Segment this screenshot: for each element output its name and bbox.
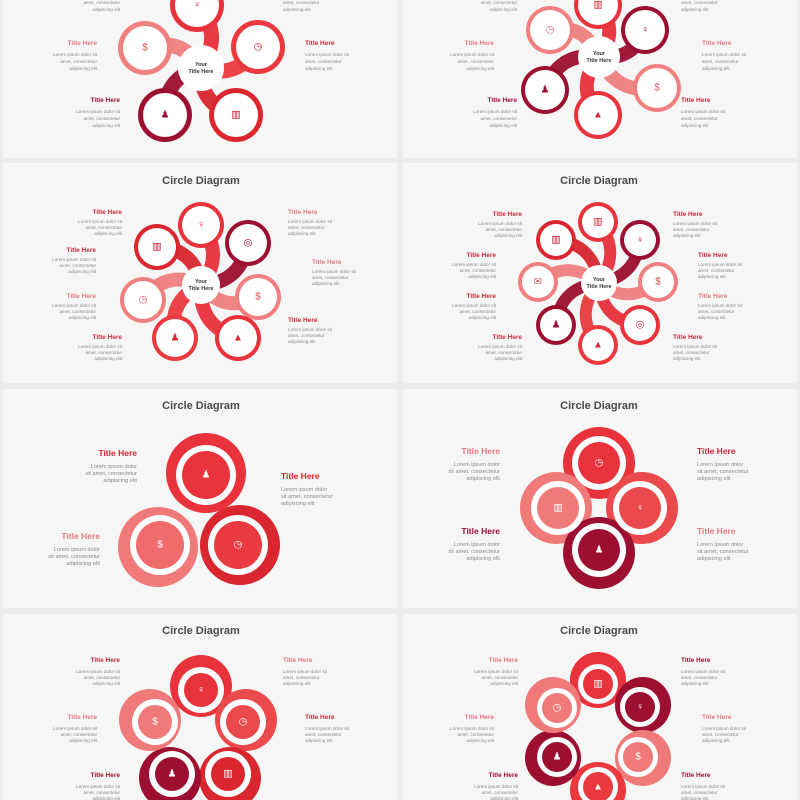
- text blocks row2 right: Title Here: [698, 252, 728, 259]
- text blocks row2 right: Title Here: [492, 211, 522, 218]
- text blocks row3 left: sit amet, consectetur: [281, 494, 333, 500]
- text blocks row2 right: Lorem ipsum dolor sit: [698, 262, 743, 267]
- circle nodes: ▲: [233, 332, 243, 344]
- center: Your Title Here: [581, 265, 617, 301]
- panel: 6-circle diagram (row4 right): $: [635, 752, 641, 762]
- text blocks row3 right: sit amet, consectetur: [448, 469, 500, 475]
- center: Your Title Here: [578, 36, 620, 78]
- center: Your Title Here: [178, 45, 224, 91]
- text blocks row2 left: adipiscing elit: [68, 315, 97, 320]
- circle nodes: ◷: [254, 42, 263, 52]
- circle nodes: ✉: [534, 276, 542, 288]
- text blocks row2 right: amet, consectetur: [698, 309, 735, 314]
- text blocks row4 right: amet, consectetur: [702, 732, 739, 737]
- text blocks row1 left: adipiscing elit: [69, 66, 98, 71]
- text blocks row4 right: adipiscing elit: [681, 681, 709, 686]
- text blocks row2 left: Title Here: [288, 317, 318, 324]
- text blocks row4 right: Lorem ipsum dolor sit: [681, 669, 726, 674]
- text blocks row3 right: Lorem ipsum dolor: [697, 542, 743, 548]
- text blocks row3 right: sit amet, consectetur: [448, 549, 500, 555]
- text blocks row1 right: adipiscing elit: [702, 66, 730, 71]
- text blocks row2 right: Lorem ipsum dolor sit: [478, 344, 523, 349]
- text blocks row4 right: Title Here: [464, 714, 494, 721]
- text blocks row2 left: amet, consectetur: [288, 225, 325, 230]
- text blocks row2 left: adipiscing elit: [288, 231, 316, 236]
- text blocks row1 right: amet, consectetur: [681, 116, 718, 121]
- text blocks row1 right: Lorem ipsum dolor sit: [702, 52, 747, 57]
- panel: 6-petal swirl (row1 right): [521, 0, 681, 139]
- panel: 5-petal swirl (row1 left): [118, 0, 285, 142]
- text blocks row2 left: Lorem ipsum dolor sit: [288, 327, 333, 332]
- heading row4 left: Circle Diagram: [162, 625, 240, 637]
- panel: 6-circle diagram (row4 right): ◷: [553, 702, 562, 714]
- text blocks row1 right: Title Here: [681, 97, 711, 104]
- text blocks row3 left: Lorem ipsum dolor: [91, 464, 137, 470]
- swirl petals: [538, 222, 658, 345]
- panel: 3-circle diagram (row3 left): ♟: [202, 470, 210, 480]
- text blocks row1 right: Lorem ipsum dolor sit: [473, 109, 518, 114]
- text blocks row3 left: Title Here: [61, 531, 100, 541]
- circle nodes: $: [654, 82, 660, 94]
- panel: 5-circle diagram (row4 left): ◷: [239, 716, 248, 728]
- text blocks row1 right: adipiscing elit: [489, 7, 518, 12]
- text blocks row4 right: amet, consectetur: [481, 790, 518, 795]
- text blocks row1 right: adipiscing elit: [489, 123, 518, 128]
- text blocks row4 right: [450, 657, 747, 800]
- text blocks row1 left: amet, consectetur: [283, 0, 320, 5]
- text blocks row2 right: adipiscing elit: [698, 274, 726, 279]
- text blocks row3 left: [48, 448, 333, 567]
- text blocks row1 right: Title Here: [702, 40, 732, 47]
- circle nodes: $: [255, 292, 261, 302]
- text blocks row2 right: amet, consectetur: [485, 227, 522, 232]
- text blocks row4 right: Title Here: [702, 714, 732, 721]
- panel: 3-circle diagram (row3 left): [118, 433, 280, 587]
- center: Your Title Here: Title Here: [587, 58, 611, 64]
- text blocks row2 right: Lorem ipsum dolor sit: [452, 303, 497, 308]
- text blocks row1 right: adipiscing elit: [466, 66, 495, 71]
- panel: 6-circle diagram (row4 right): ▲: [593, 782, 603, 792]
- text blocks row4 right: Lorem ipsum dolor sit: [474, 784, 519, 789]
- center: Your Title Here: Your: [593, 51, 606, 57]
- text blocks row4 left: [53, 657, 350, 800]
- text blocks row1 right: amet, consectetur: [681, 0, 718, 5]
- text blocks row1 left: Lorem ipsum dolor sit: [305, 52, 350, 57]
- text blocks row1 left: adipiscing elit: [305, 66, 333, 71]
- heading row2 left: Circle Diagram: [162, 175, 240, 187]
- text blocks row4 left: Lorem ipsum dolor sit: [305, 726, 350, 731]
- panel: 4-circle diagram (row3 right): ♀: [636, 502, 644, 514]
- circle nodes: ▲: [593, 340, 603, 350]
- text blocks row2 left: amet, consectetur: [85, 350, 122, 355]
- text blocks row2 left: amet, consectetur: [59, 263, 96, 268]
- text blocks row4 right: Title Here: [488, 772, 518, 779]
- circle nodes: ▥: [551, 234, 561, 246]
- swirl petals: [143, 225, 258, 338]
- text blocks row3 right: adipiscing elit: [697, 476, 731, 482]
- text blocks row2 left: adipiscing elit: [68, 269, 97, 274]
- circle nodes: ◎: [636, 320, 644, 330]
- text blocks row3 right: adipiscing elit: [466, 476, 500, 482]
- text blocks row2 right: adipiscing elit: [698, 315, 726, 320]
- circle nodes: [521, 0, 681, 139]
- panel: 8-petal swirl (row2 right): [518, 202, 678, 365]
- text blocks row1 left: amet, consectetur: [83, 116, 120, 121]
- circle nodes: ♀: [197, 220, 205, 230]
- text blocks row1 left: adipiscing elit: [92, 123, 121, 128]
- text blocks row2 right: Title Here: [466, 293, 496, 300]
- text blocks row1 left: amet, consectetur: [60, 59, 97, 64]
- text blocks row2 right: amet, consectetur: [698, 268, 735, 273]
- panel: 5-circle diagram (row4 left): [119, 655, 277, 800]
- text blocks row3 left: adipiscing elit: [103, 478, 137, 484]
- text blocks row1 right: Lorem ipsum dolor sit: [681, 109, 726, 114]
- panel: 4-circle diagram (row3 right): ◷: [595, 458, 604, 468]
- panel: 4-circle diagram (row3 right): ▥: [553, 502, 563, 514]
- text blocks row2 right: amet, consectetur: [673, 350, 710, 355]
- text blocks row2 right: Lorem ipsum dolor sit: [673, 221, 718, 226]
- text blocks row1 right: amet, consectetur: [702, 59, 739, 64]
- text blocks row4 left: amet, consectetur: [305, 732, 342, 737]
- text blocks row2 left: adipiscing elit: [94, 356, 123, 361]
- panel: 6-circle diagram (row4 right): [525, 652, 671, 800]
- text blocks row2 right: adipiscing elit: [468, 315, 497, 320]
- text blocks row4 left: amet, consectetur: [83, 790, 120, 795]
- text blocks row4 left: Title Here: [90, 657, 120, 664]
- panel: 5-circle diagram (row4 left): ♟: [168, 768, 176, 780]
- text blocks row4 right: Title Here: [681, 772, 711, 779]
- circle nodes: ♀: [636, 234, 644, 246]
- text blocks row2 left: amet, consectetur: [312, 275, 349, 280]
- text blocks row3 left: sit amet, consectetur: [48, 554, 100, 560]
- circle nodes: ♟: [552, 320, 560, 330]
- panel: 4-circle diagram (row3 right): ♟: [595, 544, 603, 556]
- text blocks row4 right: adipiscing elit: [466, 738, 495, 743]
- text blocks row4 left: amet, consectetur: [283, 675, 320, 680]
- text blocks row3 right: sit amet, consectetur: [697, 469, 749, 475]
- panel: 5-circle diagram (row4 left): ▥: [223, 768, 233, 780]
- panel: 3-circle diagram (row3 left): ◷: [234, 540, 243, 550]
- text blocks row4 right: amet, consectetur: [481, 675, 518, 680]
- text blocks row2 left: Title Here: [66, 293, 96, 300]
- circle nodes: ▥: [152, 242, 162, 252]
- text blocks row3 right: Lorem ipsum dolor: [697, 462, 743, 468]
- text blocks row4 right: adipiscing elit: [490, 681, 519, 686]
- text blocks row3 right: Title Here: [697, 526, 736, 536]
- text blocks row2 left: Lorem ipsum dolor sit: [288, 219, 333, 224]
- text blocks row2 right: amet, consectetur: [459, 309, 496, 314]
- text blocks row2 right: adipiscing elit: [494, 233, 523, 238]
- circle nodes: ◷: [546, 24, 555, 36]
- text blocks row4 right: amet, consectetur: [681, 675, 718, 680]
- circle nodes: [518, 202, 678, 365]
- panel: 6-circle diagram (row4 right): ▥: [593, 678, 603, 690]
- text blocks row4 left: amet, consectetur: [83, 675, 120, 680]
- text blocks row2 right: adipiscing elit: [673, 356, 701, 361]
- text blocks row4 left: amet, consectetur: [60, 732, 97, 737]
- text blocks row4 right: Title Here: [488, 657, 518, 664]
- heading row3 right: Circle Diagram: [560, 400, 638, 412]
- text blocks row2 left: Title Here: [288, 209, 318, 216]
- text blocks row2 right: amet, consectetur: [673, 227, 710, 232]
- text blocks row4 left: Title Here: [90, 772, 120, 779]
- text blocks row2 left: adipiscing elit: [94, 231, 123, 236]
- circle nodes: ♟: [161, 110, 169, 120]
- text blocks row4 left: Lorem ipsum dolor sit: [53, 726, 98, 731]
- text blocks row2 right: amet, consectetur: [485, 350, 522, 355]
- text blocks row3 right: sit amet, consectetur: [697, 549, 749, 555]
- text blocks row1 right: Title Here: [464, 40, 494, 47]
- text blocks row1 right: adipiscing elit: [681, 7, 709, 12]
- circle nodes: ♀: [641, 24, 649, 36]
- text blocks row2 right: amet, consectetur: [459, 268, 496, 273]
- text blocks row4 left: Lorem ipsum dolor sit: [76, 784, 121, 789]
- text blocks row3 right: Lorem ipsum dolor: [454, 542, 500, 548]
- text blocks row1 left: Title Here: [67, 40, 97, 47]
- panel: 6-circle diagram (row4 right): ♟: [553, 752, 561, 762]
- text blocks row4 left: Lorem ipsum dolor sit: [283, 669, 328, 674]
- text blocks row4 left: Title Here: [305, 714, 335, 721]
- text blocks row3 left: Lorem ipsum dolor: [281, 487, 327, 493]
- text blocks row4 left: adipiscing elit: [305, 738, 333, 743]
- text blocks row1 right: amet, consectetur: [457, 59, 494, 64]
- text blocks row4 left: adipiscing elit: [92, 681, 121, 686]
- text blocks row3 left: Title Here: [281, 471, 320, 481]
- panel: 4-circle diagram (row3 right): [520, 427, 678, 589]
- text blocks row2 left: Lorem ipsum dolor sit: [52, 257, 97, 262]
- circle nodes: ▥: [593, 216, 603, 228]
- center: Your Title Here: Title Here: [189, 286, 213, 292]
- center: Your Title Here: [182, 266, 220, 304]
- circle nodes: ▥: [231, 110, 241, 120]
- text blocks row2 right: Lorem ipsum dolor sit: [673, 344, 718, 349]
- text blocks row3 left: sit amet, consectetur: [85, 471, 137, 477]
- circle nodes: ▲: [593, 110, 603, 120]
- text blocks row1 left: Title Here: [90, 97, 120, 104]
- text blocks row4 right: amet, consectetur: [457, 732, 494, 737]
- text blocks row3 left: Title Here: [98, 448, 137, 458]
- text blocks row3 right: [448, 446, 749, 562]
- text blocks row3 right: adipiscing elit: [466, 556, 500, 562]
- center: Your Title Here: Your: [195, 62, 208, 68]
- text blocks row2 right: adipiscing elit: [494, 356, 523, 361]
- circle nodes: [120, 202, 281, 361]
- text blocks row2 right: adipiscing elit: [468, 274, 497, 279]
- circle nodes: $: [142, 42, 148, 54]
- text blocks row2 left: amet, consectetur: [85, 225, 122, 230]
- center: Your Title Here: Your: [593, 277, 606, 283]
- text blocks row3 left: adipiscing elit: [66, 561, 100, 567]
- circle nodes: ◎: [244, 238, 252, 248]
- heading row4 right: Circle Diagram: [560, 625, 638, 637]
- text blocks row4 right: Lorem ipsum dolor sit: [702, 726, 747, 731]
- panel: 5-circle diagram (row4 left): $: [152, 716, 158, 728]
- center: Your Title Here: Title Here: [587, 284, 611, 290]
- text blocks row4 left: Title Here: [67, 714, 97, 721]
- panel: 3-circle diagram (row3 left): $: [157, 540, 163, 550]
- text blocks row3 right: adipiscing elit: [697, 556, 731, 562]
- swirl petals: [145, 5, 258, 115]
- text blocks row2 right: Title Here: [673, 334, 703, 341]
- heading row2 right: Circle Diagram: [560, 175, 638, 187]
- text blocks row4 right: Title Here: [681, 657, 711, 664]
- circle nodes: ♟: [171, 332, 179, 344]
- panel: 6-circle diagram (row4 right): ♀: [636, 702, 644, 712]
- text blocks row2 left: Title Here: [92, 334, 122, 341]
- text blocks row2 left: Lorem ipsum dolor sit: [78, 219, 123, 224]
- center: Your Title Here: Title Here: [189, 69, 213, 75]
- text blocks row1 right: amet, consectetur: [480, 0, 517, 5]
- text blocks row3 right: Lorem ipsum dolor: [454, 462, 500, 468]
- text blocks row4 right: Lorem ipsum dolor sit: [474, 669, 519, 674]
- circle nodes: [118, 0, 285, 142]
- text blocks row1 left: adipiscing elit: [92, 7, 121, 12]
- text blocks row2 left: adipiscing elit: [312, 281, 340, 286]
- text blocks row1 right: [450, 0, 747, 128]
- text blocks row3 right: Title Here: [461, 446, 500, 456]
- text blocks row1 left: amet, consectetur: [305, 59, 342, 64]
- text blocks row1 left: Lorem ipsum dolor sit: [53, 52, 98, 57]
- panel: 5-circle diagram (row4 left): ♀: [197, 684, 205, 696]
- text blocks row1 left: amet, consectetur: [83, 0, 120, 5]
- heading row3 left: Circle Diagram: [162, 400, 240, 412]
- text blocks row1 left: Lorem ipsum dolor sit: [76, 109, 121, 114]
- text blocks row1 left: adipiscing elit: [283, 7, 311, 12]
- text blocks row3 right: Title Here: [461, 526, 500, 536]
- circle nodes: $: [655, 276, 661, 288]
- text blocks row1 right: Lorem ipsum dolor sit: [450, 52, 495, 57]
- text blocks row2 right: Lorem ipsum dolor sit: [452, 262, 497, 267]
- text blocks row1 left: [53, 0, 350, 128]
- text blocks row4 left: Title Here: [283, 657, 313, 664]
- text blocks row4 right: amet, consectetur: [681, 790, 718, 795]
- text blocks row4 right: Lorem ipsum dolor sit: [681, 784, 726, 789]
- text blocks row3 left: adipiscing elit: [281, 501, 315, 507]
- text blocks row2 left: Title Here: [312, 259, 342, 266]
- text blocks row3 left: Lorem ipsum dolor: [54, 547, 100, 553]
- text blocks row1 left: Title Here: [305, 40, 335, 47]
- text blocks row2 right: Title Here: [673, 211, 703, 218]
- text blocks row1 right: adipiscing elit: [681, 123, 709, 128]
- text blocks row2 left: Title Here: [92, 209, 122, 216]
- text blocks row2 left: Lorem ipsum dolor sit: [52, 303, 97, 308]
- text blocks row2 right: Lorem ipsum dolor sit: [698, 303, 743, 308]
- text blocks row2 left: Lorem ipsum dolor sit: [312, 269, 357, 274]
- text blocks row2 left: Title Here: [66, 247, 96, 254]
- circle nodes: ◷: [139, 294, 148, 306]
- text blocks row2 left: [52, 209, 357, 361]
- text blocks row4 left: adipiscing elit: [69, 738, 98, 743]
- text blocks row2 left: Lorem ipsum dolor sit: [78, 344, 123, 349]
- circle nodes: ♟: [541, 84, 549, 96]
- text blocks row2 left: amet, consectetur: [59, 309, 96, 314]
- text blocks row4 right: Lorem ipsum dolor sit: [450, 726, 495, 731]
- center: Your Title Here: Your: [195, 279, 208, 285]
- text blocks row2 right: Lorem ipsum dolor sit: [478, 221, 523, 226]
- text blocks row3 right: Title Here: [697, 446, 736, 456]
- text blocks row2 right: [452, 211, 743, 361]
- text blocks row4 left: Lorem ipsum dolor sit: [76, 669, 121, 674]
- text blocks row1 right: Title Here: [487, 97, 517, 104]
- text blocks row4 left: adipiscing elit: [283, 681, 311, 686]
- panel: 7-petal swirl (row2 left): [120, 202, 281, 361]
- text blocks row2 left: adipiscing elit: [288, 339, 316, 344]
- swirl petals: [545, 5, 657, 115]
- text blocks row2 right: Title Here: [492, 334, 522, 341]
- text blocks row4 right: adipiscing elit: [702, 738, 730, 743]
- text blocks row2 left: amet, consectetur: [288, 333, 325, 338]
- text blocks row2 right: Title Here: [466, 252, 496, 259]
- text blocks row2 right: adipiscing elit: [673, 233, 701, 238]
- text blocks row2 right: Title Here: [698, 293, 728, 300]
- text blocks row1 right: amet, consectetur: [480, 116, 517, 121]
